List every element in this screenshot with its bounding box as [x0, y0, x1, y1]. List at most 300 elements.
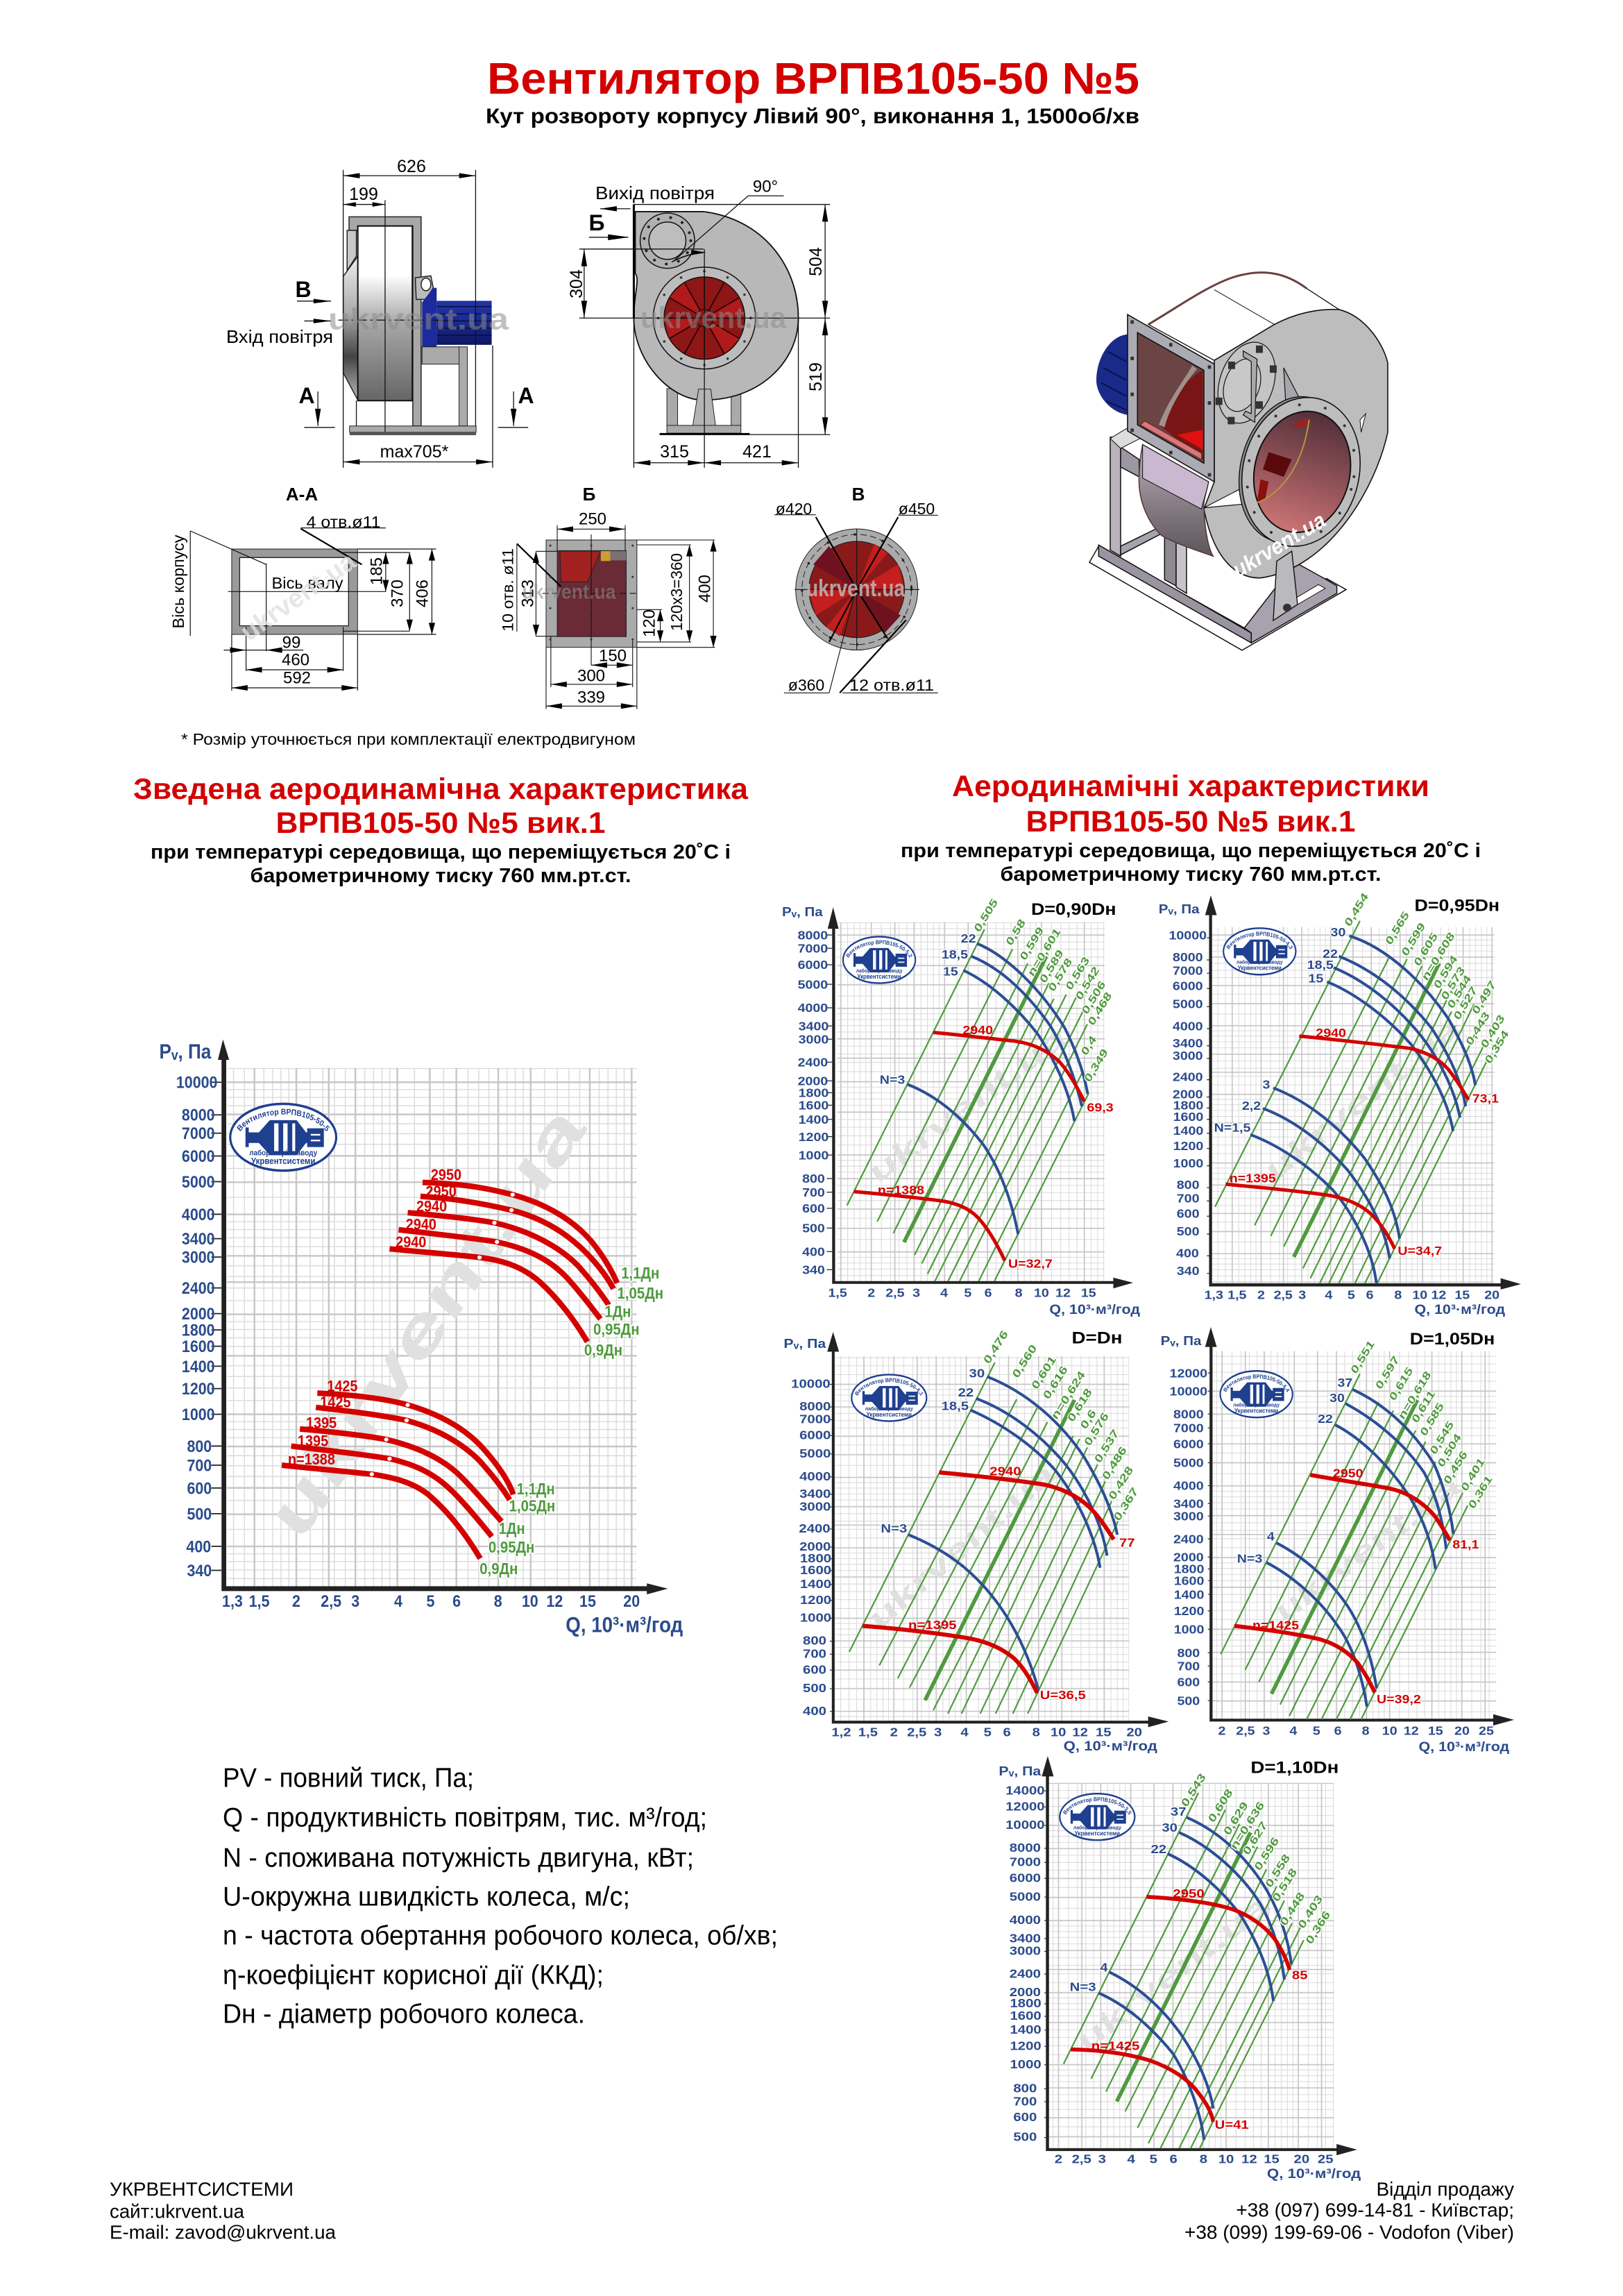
chart: D=1,10Dн: Pᵥ, Па	[999, 1764, 1042, 1779]
footer: company contacts: E-mail: zavod@ukrvent.ua	[110, 2221, 336, 2243]
chart: D=Dн: Pᵥ, Па	[783, 1337, 826, 1351]
chart: D=0,90Dн: U=32,7	[1008, 1256, 1053, 1270]
chart: D=1,10Dн: 14000	[1005, 1784, 1045, 1798]
chart: D=0,90Dн: 4	[940, 1285, 949, 1299]
chart: summary characteristic: 4000	[182, 1205, 215, 1224]
chart: D=Dн: 6000	[799, 1428, 831, 1442]
chart: D=1,10Dн: 600	[1013, 2111, 1037, 2125]
heading: aerodynamic characteristics	[901, 770, 1481, 886]
chart: D=0,95Dн: 6000	[1173, 979, 1203, 993]
chart: summary characteristic: 2950	[426, 1183, 457, 1200]
chart: D=Dн: 0,476	[981, 1328, 1010, 1366]
section Б outlet flange drawing: 339	[577, 689, 605, 707]
chart: D=1,05Dн: 2400	[1173, 1532, 1204, 1546]
chart: summary characteristic: 500	[187, 1504, 212, 1523]
logo stamp: Вентилятор ВРПВ105-50-5	[237, 1109, 330, 1131]
chart: D=0,90Dн: 500	[802, 1221, 825, 1235]
logo stamp: Вентилятор ВРПВ105-50-4,1	[855, 1378, 923, 1396]
chart: D=0,95Dн: 1,5	[1227, 1288, 1246, 1301]
chart: D=0,95Dн: Pᵥ, Па	[1159, 902, 1200, 917]
chart: D=0,90Dн: 0,468	[1085, 989, 1114, 1028]
chart: D=1,10Dн: 20	[1294, 2153, 1309, 2166]
chart: D=1,05Dн: 7000	[1173, 1421, 1204, 1435]
chart: D=1,10Dн	[999, 1756, 1361, 2181]
chart: D=1,05Dн: N=3	[1237, 1551, 1262, 1565]
heading: summary characteristic: ВРПВ105-50 №5 вик.1	[276, 807, 605, 840]
chart: D=1,05Dн: 1800	[1174, 1562, 1204, 1576]
chart: D=1,10Dн: 15	[1264, 2153, 1280, 2166]
legend text block: U-окружна швидкість колеса, м/с;	[223, 1882, 630, 1911]
chart: summary characteristic: 6	[452, 1592, 461, 1610]
chart: D=1,10Dн: 12000	[1005, 1800, 1045, 1814]
logo stamp: лабораторія заводу	[865, 1406, 914, 1412]
chart: D=Dн: 6	[1003, 1725, 1011, 1739]
chart: D=1,05Dн: 3400	[1173, 1496, 1204, 1510]
chart: D=0,90Dн: 5000	[798, 977, 828, 991]
chart: D=Dн: 18,5	[942, 1399, 969, 1413]
chart: D=0,95Dн: 0,527	[1451, 984, 1479, 1022]
chart: D=1,05Dн: 1200	[1174, 1604, 1204, 1618]
chart: D=0,90Dн: 0,349	[1082, 1046, 1110, 1085]
chart: D=0,90Dн: 700	[802, 1185, 825, 1199]
chart: D=1,05Dн: 0,361	[1466, 1473, 1495, 1511]
chart: D=Dн: 10000	[791, 1378, 831, 1391]
chart: D=Dн: 0,367	[1111, 1485, 1141, 1523]
chart: D=0,90Dн: 15	[943, 964, 958, 978]
chart: D=1,05Dн: 10	[1382, 1723, 1397, 1737]
chart: D=0,95Dн: 7000	[1173, 963, 1203, 977]
chart: D=0,90Dн: 2000	[798, 1074, 828, 1088]
chart: D=1,05Dн: 4	[1267, 1529, 1275, 1543]
footer: sales contacts	[1184, 2178, 1514, 2243]
chart: summary characteristic: 1,05Дн	[509, 1497, 555, 1515]
chart: D=1,10Dн: 3	[1098, 2153, 1106, 2166]
chart: D=1,10Dн: 0,558	[1263, 1852, 1292, 1890]
chart: D=0,95Dн: 700	[1177, 1191, 1199, 1205]
chart: D=0,95Dн: n=0,608	[1419, 929, 1456, 983]
isometric fan 3D view: ukrvent.ua	[1227, 507, 1330, 582]
chart: D=Dн: 0,537	[1092, 1427, 1121, 1465]
chart: D=Dн: 1600	[800, 1564, 831, 1578]
chart: D=0,90Dн: 600	[802, 1201, 825, 1215]
chart: D=1,10Dн: 2000	[1010, 1986, 1041, 2000]
chart: D=Dн: 5000	[799, 1447, 831, 1461]
chart: D=1,05Dн: n=0,618	[1395, 1369, 1433, 1421]
chart: D=Dн: D=Dн	[1071, 1328, 1123, 1347]
isometric fan 3D view	[1089, 273, 1388, 650]
legend text block	[223, 1763, 778, 2029]
chart: D=0,95Dн: 0,403	[1478, 1012, 1506, 1051]
chart: D=1,10Dн: 8	[1200, 2153, 1207, 2166]
chart: D=Dн: ukrvent.ua	[863, 1455, 1062, 1637]
chart: summary characteristic: 5	[427, 1592, 435, 1610]
chart: D=0,90Dн: 3000	[799, 1032, 829, 1046]
legend text block: N - споживана потужність двигуна, кВт;	[223, 1843, 694, 1873]
chart: D=1,10Dн: ukrvent.ua	[1071, 1887, 1275, 2059]
chart: D=0,95Dн: 3	[1262, 1078, 1270, 1092]
chart: D=0,90Dн: 2	[867, 1285, 875, 1299]
heading: aerodynamic characteristics: при температурі середовища, що переміщується 20˚С і	[901, 840, 1481, 862]
section Б outlet flange drawing: 150	[599, 647, 627, 665]
chart: D=1,05Dн: 37	[1338, 1376, 1352, 1390]
chart: D=Dн: 3	[934, 1725, 942, 1739]
chart: D=Dн: 0,576	[1082, 1410, 1111, 1449]
chart: D=1,10Dн: 37	[1171, 1805, 1187, 1819]
footnote: * Розмір уточнюється при комплектації електродвигуном	[181, 730, 636, 748]
chart: D=0,95Dн: 0,354	[1482, 1027, 1511, 1066]
chart: D=Dн: 8	[1033, 1725, 1040, 1739]
chart: summary characteristic: Pᵥ, Па	[160, 1040, 212, 1063]
chart: summary characteristic: 3	[351, 1592, 359, 1610]
view В inlet drawing: 12 отв.ø11	[849, 676, 934, 694]
chart: D=0,90Dн: 1400	[799, 1113, 829, 1126]
chart: D=Dн: 22	[958, 1386, 974, 1400]
logo stamp: лабораторія заводу	[1233, 1401, 1280, 1408]
chart: D=Dн: 1,5	[858, 1725, 878, 1739]
chart: D=1,05Dн: 800	[1177, 1646, 1200, 1660]
chart: D=0,90Dн: 1800	[799, 1086, 829, 1099]
chart: summary characteristic: ukrvent.ua	[254, 1089, 599, 1553]
chart: D=1,05Dн: 12000	[1170, 1366, 1207, 1380]
section A-A drawing: 4 отв.ø11	[307, 513, 380, 531]
chart: D=1,10Dн: U=41	[1215, 2118, 1249, 2132]
chart: summary characteristic: 5000	[182, 1172, 215, 1191]
chart: D=0,90Dн: 0,578	[1046, 955, 1074, 994]
chart: D=1,10Dн: 5000	[1010, 1890, 1041, 1904]
chart: D=1,05Dн: 0,401	[1459, 1455, 1487, 1494]
chart: D=1,05Dн: 1000	[1174, 1622, 1204, 1636]
chart: summary characteristic: 1,5	[249, 1592, 270, 1610]
chart: D=1,05Dн: 2950	[1333, 1466, 1363, 1480]
chart: D=0,95Dн: U=34,7	[1397, 1244, 1442, 1258]
chart: summary characteristic: 1800	[182, 1320, 215, 1340]
chart: D=0,95Dн: 18,5	[1307, 958, 1334, 972]
chart: summary characteristic: 2940	[416, 1199, 447, 1215]
chart: D=Dн: 1800	[800, 1552, 831, 1566]
chart: D=Dн: N=3	[881, 1522, 907, 1536]
chart: D=1,05Dн: 700	[1177, 1659, 1200, 1673]
chart: summary characteristic: 600	[187, 1478, 212, 1498]
chart: summary characteristic: 2	[292, 1592, 300, 1610]
section A-A drawing: 460	[282, 651, 309, 669]
chart: D=Dн: 77	[1119, 1537, 1135, 1550]
chart: summary characteristic: 6000	[182, 1147, 215, 1165]
chart: D=1,10Dн: 700	[1013, 2095, 1037, 2109]
chart: D=Dн: 1,2	[831, 1725, 851, 1739]
logo stamp: Укрвентсистеми	[1075, 1830, 1120, 1837]
heading: summary characteristic: при температурі середовища, що переміщується 20˚С і	[151, 841, 731, 863]
chart: summary characteristic: 1Дн	[499, 1519, 525, 1537]
chart: D=Dн: 4	[960, 1725, 969, 1739]
chart: D=0,90Dн: 6000	[798, 958, 828, 972]
chart: D=0,90Dн: 18,5	[942, 947, 968, 961]
logo stamp	[842, 936, 916, 984]
chart: D=1,10Dн: n=0,636	[1227, 1799, 1266, 1852]
chart: D=1,05Dн: ukrvent.ua	[1270, 1467, 1465, 1629]
section A-A drawing	[169, 484, 436, 691]
chart: D=1,05Dн: 0,585	[1418, 1400, 1446, 1438]
chart: D=1,10Dн: 0,403	[1295, 1893, 1325, 1931]
chart: D=0,90Dн: 4000	[798, 1001, 828, 1015]
chart: D=Dн: 3400	[799, 1487, 831, 1501]
chart: D=1,10Dн: Q, 10³·м³/год	[1267, 2166, 1361, 2181]
chart: summary characteristic: Q, 10³·м³/год	[566, 1613, 683, 1637]
side view drawing	[226, 157, 534, 468]
chart: D=0,95Dн: 5000	[1173, 997, 1203, 1011]
chart: D=1,10Dн: 8000	[1010, 1841, 1041, 1855]
chart: D=0,95Dн: 2000	[1173, 1087, 1203, 1101]
logo stamp: Вентилятор ВРПВ105-50-4,4	[1223, 1374, 1289, 1392]
chart: D=1,05Dн: 22	[1318, 1412, 1333, 1426]
logo stamp	[1059, 1793, 1135, 1841]
speed curves	[1071, 1897, 1289, 2122]
chart: D=Dн: 5	[984, 1725, 992, 1739]
logo stamp: Укрвентсистеми	[867, 1411, 912, 1418]
heading: summary characteristic: барометричному тиску 760 мм.рт.ст.	[250, 865, 631, 887]
title: Вентилятор ВРПВ105-50 №5	[487, 53, 1139, 103]
logo stamp	[1223, 927, 1296, 976]
section A-A drawing: 99	[282, 633, 300, 652]
chart: summary characteristic: 1425	[327, 1378, 358, 1395]
footer: company contacts	[110, 2178, 336, 2243]
chart: D=1,05Dн: 1400	[1174, 1587, 1204, 1601]
chart: D=0,90Dн: 3400	[799, 1019, 829, 1033]
chart: summary characteristic: 1,3	[222, 1592, 243, 1610]
section Б outlet flange drawing: 250	[579, 509, 606, 529]
front view drawing: 504	[806, 247, 826, 276]
efficiency lines	[1215, 921, 1488, 1283]
chart: D=1,10Dн: 2	[1055, 2153, 1062, 2166]
chart: D=Dн	[783, 1328, 1169, 1754]
footer: company contacts: сайт:ukrvent.ua	[110, 2200, 244, 2222]
chart: D=0,95Dн: Q, 10³·м³/год	[1414, 1302, 1505, 1317]
chart: D=Dн: 0,6	[1078, 1407, 1098, 1431]
chart: D=0,95Dн: 340	[1177, 1264, 1199, 1278]
chart: summary characteristic: 700	[187, 1455, 212, 1475]
chart: D=1,05Dн: 30	[1329, 1391, 1345, 1405]
chart: D=1,05Dн: 10000	[1170, 1384, 1207, 1398]
side view drawing: В	[295, 277, 312, 302]
chart: D=1,05Dн: 2	[1218, 1723, 1225, 1737]
chart: D=0,95Dн: 10	[1412, 1288, 1427, 1301]
chart: D=Dн: 700	[803, 1647, 826, 1661]
legend text block: η-коефіцієнт корисної дії (ККД);	[223, 1960, 604, 1991]
chart: D=1,10Dн: 85	[1292, 1968, 1308, 1982]
chart: D=0,95Dн: 0,594	[1431, 952, 1460, 991]
chart: D=0,95Dн: 8000	[1173, 950, 1203, 964]
chart: D=0,95Dн: 2	[1257, 1288, 1265, 1301]
chart: D=0,90Dн: 2400	[798, 1055, 828, 1069]
chart: D=1,10Dн: 2,5	[1072, 2153, 1091, 2166]
logo stamp: Укрвентсистеми	[858, 972, 901, 980]
chart: D=Dн: 2940	[989, 1464, 1021, 1478]
footer: sales contacts: Відділ продажу	[1376, 2178, 1514, 2200]
chart: D=Dн: 2	[890, 1725, 898, 1739]
logo stamp: Укрвентсистеми	[1234, 1407, 1278, 1415]
chart: D=0,95Dн: 12	[1431, 1288, 1446, 1301]
chart: D=0,90Dн: 0,589	[1037, 947, 1066, 986]
chart: D=1,05Dн: 15	[1428, 1723, 1443, 1737]
logo stamp: Вентилятор ВРПВ105-50-5,2	[846, 940, 912, 958]
chart: D=Dн: 0,486	[1100, 1444, 1129, 1483]
logo stamp: Укрвентсистеми	[1238, 964, 1282, 972]
chart: D=0,95Dн: D=0,95Dн	[1415, 897, 1499, 915]
front view drawing: 421	[742, 442, 772, 462]
chart: D=Dн: 0,428	[1106, 1464, 1135, 1502]
chart: D=1,10Dн: 0,366	[1303, 1908, 1332, 1947]
chart: D=0,95Dн: 15	[1308, 972, 1323, 986]
chart: D=0,95Dн: 2940	[1316, 1026, 1346, 1040]
legend text block: Dн - діаметр робочого колеса.	[223, 1999, 585, 2029]
side view drawing: ukrvent.ua	[328, 303, 509, 336]
chart: summary characteristic: 15	[579, 1592, 596, 1610]
section A-A drawing: 592	[283, 669, 311, 687]
chart: summary characteristic: 1000	[182, 1405, 215, 1424]
side view drawing: А	[298, 383, 315, 408]
chart: D=0,90Dн: 15	[1081, 1285, 1096, 1299]
chart: D=1,05Dн: 0,615	[1386, 1365, 1415, 1403]
footer: sales contacts: +38 (097) 699-14-81 - Київстар;	[1236, 2199, 1514, 2221]
chart: D=1,05Dн	[1161, 1327, 1514, 1755]
chart: D=1,10Dн: N=3	[1070, 1981, 1096, 1994]
logo stamp	[851, 1374, 927, 1422]
heading: summary characteristic: Зведена аеродинамічна характеристика	[133, 773, 749, 806]
chart: summary characteristic: 10	[522, 1592, 538, 1610]
logo stamp: лабораторія заводу	[249, 1149, 317, 1157]
chart: summary characteristic: 0,9Дн	[584, 1341, 622, 1359]
chart: D=1,05Dн: 8000	[1173, 1407, 1204, 1421]
chart: D=0,90Dн: 0,58	[1003, 916, 1028, 948]
section A-A drawing: А-А	[286, 484, 318, 505]
side view drawing: А	[518, 383, 534, 408]
chart: D=0,95Dн: 0,605	[1411, 930, 1440, 968]
chart: D=1,10Dн: 3000	[1010, 1945, 1041, 1958]
chart: summary characteristic: 2940	[406, 1217, 436, 1233]
chart: D=1,10Dн: 0,543	[1179, 1771, 1208, 1809]
section A-A drawing: 370	[389, 580, 407, 607]
chart: D=1,05Dн: 0,597	[1373, 1353, 1402, 1392]
legend text block: Q - продуктивність повітрям, тис. м³/год;	[223, 1803, 707, 1832]
side view drawing: Вхід повітря	[226, 326, 333, 347]
chart: D=Dн: 3000	[799, 1500, 831, 1514]
chart: D=0,95Dн: 0,454	[1342, 890, 1371, 929]
chart: D=1,05Dн: 5	[1313, 1723, 1320, 1737]
chart: D=0,90Dн: 340	[802, 1263, 825, 1276]
chart: D=Dн: 7000	[799, 1413, 831, 1426]
chart: D=1,10Dн: 4	[1100, 1961, 1108, 1975]
chart: D=Dн: 1400	[800, 1578, 831, 1592]
chart: D=0,95Dн: 0,565	[1383, 909, 1411, 947]
logo stamp: Вентилятор ВРПВ105-50-4,3	[1227, 931, 1293, 949]
chart: D=0,95Dн: 73,1	[1472, 1092, 1499, 1106]
chart: D=Dн: 4000	[799, 1470, 831, 1484]
chart: summary characteristic: 0,95Дн	[488, 1538, 534, 1556]
legend text block: n - частота обертання робочого колеса, об/хв;	[223, 1921, 778, 1950]
chart: D=0,95Dн: 800	[1177, 1178, 1199, 1192]
chart: D=1,10Dн: 10000	[1005, 1818, 1045, 1832]
chart: D=1,10Dн: 7000	[1010, 1856, 1041, 1869]
chart: summary characteristic: 1,05Дн	[618, 1284, 663, 1303]
chart: D=1,10Dн: 1600	[1010, 2009, 1042, 2023]
chart: D=Dн: Q, 10³·м³/год	[1064, 1739, 1157, 1754]
power curves	[1266, 1390, 1453, 1707]
power curves	[907, 943, 1088, 1234]
front view drawing: 90°	[753, 178, 778, 196]
front view drawing: 519	[806, 362, 826, 391]
front view drawing: ukrvent.ua	[640, 301, 786, 335]
front view drawing: Вихід повітря	[595, 183, 715, 203]
chart: D=1,05Dн: 0,545	[1427, 1418, 1456, 1457]
chart: D=1,05Dн: 0,611	[1409, 1387, 1437, 1426]
logo stamp: лабораторія заводу	[856, 968, 902, 974]
chart: D=0,90Dн: 8000	[798, 928, 828, 942]
footer: sales contacts: +38 (099) 199-69-06 - Vodofon (Viber)	[1184, 2221, 1514, 2243]
chart: D=0,95Dн: 15	[1454, 1288, 1470, 1301]
logo stamp	[1219, 1370, 1293, 1419]
chart: D=1,10Dн: 22	[1150, 1843, 1166, 1856]
section Б outlet flange drawing: 120	[640, 609, 659, 637]
chart: D=0,95Dн: 0,599	[1399, 920, 1427, 959]
efficiency lines	[1064, 1793, 1304, 2148]
chart: D=1,05Dн: 4	[1289, 1723, 1298, 1737]
chart: D=1,10Dн: 25	[1318, 2153, 1334, 2166]
chart: D=0,90Dн	[782, 896, 1140, 1317]
side view drawing: max705*	[380, 442, 449, 462]
section A-A drawing: 406	[414, 580, 432, 607]
chart: D=0,95Dн: 600	[1177, 1206, 1199, 1220]
chart: D=Dн: 10	[1051, 1725, 1066, 1739]
chart: D=1,10Dн: 6	[1170, 2153, 1178, 2166]
chart: D=0,95Dн: 400	[1176, 1246, 1199, 1260]
section Б outlet flange drawing: Б	[583, 484, 595, 505]
chart: summary characteristic: 2950	[431, 1167, 461, 1183]
chart: D=1,10Dн: 2950	[1173, 1887, 1205, 1901]
chart: D=0,90Dн: N=3	[880, 1072, 905, 1086]
chart: D=0,95Dн: 22	[1323, 947, 1338, 961]
chart: D=1,05Dн: 5000	[1173, 1455, 1204, 1469]
chart: D=1,05Dн: 0,456	[1441, 1448, 1470, 1487]
chart: summary characteristic: 7000	[182, 1124, 215, 1142]
speed curves	[863, 1472, 1114, 1693]
side view drawing: 199	[349, 185, 378, 204]
chart: D=0,90Dн: 1000	[799, 1148, 829, 1162]
chart: D=0,90Dн: Pᵥ, Па	[782, 905, 824, 920]
chart: D=1,05Dн: 1600	[1174, 1573, 1204, 1587]
chart: D=0,95Dн: 4000	[1173, 1019, 1203, 1033]
chart: D=1,10Dн: 3400	[1010, 1932, 1041, 1945]
chart: D=0,95Dн: 30	[1331, 925, 1345, 939]
heading: aerodynamic characteristics: Аеродинамічні характеристики	[952, 770, 1429, 803]
chart: D=1,05Dн: Q, 10³·м³/год	[1419, 1739, 1509, 1755]
chart: summary characteristic: 2000	[182, 1304, 215, 1323]
chart: D=0,95Dн: 20	[1484, 1288, 1499, 1301]
chart: D=0,95Dн: 1200	[1173, 1139, 1203, 1153]
chart: D=Dн: 0,560	[1010, 1342, 1039, 1381]
chart: summary characteristic: 2400	[182, 1278, 215, 1297]
chart: D=0,95Dн: 0,443	[1463, 1009, 1492, 1048]
chart: summary characteristic: 1425	[320, 1394, 351, 1411]
chart: D=Dн: 30	[969, 1367, 985, 1381]
chart: D=1,05Dн: U=39,2	[1377, 1692, 1421, 1706]
chart: D=1,05Dн: 4000	[1173, 1479, 1204, 1493]
chart: D=0,95Dн: ukrvent.ua	[1259, 1008, 1466, 1188]
heading: summary characteristic	[133, 773, 749, 887]
chart: D=Dн: 20	[1126, 1725, 1142, 1739]
chart: D=1,05Dн: 2000	[1173, 1550, 1204, 1564]
chart: summary characteristic: 2940	[396, 1234, 426, 1251]
chart: D=Dн: n=0,624	[1048, 1368, 1088, 1421]
chart: D=1,10Dн: 1400	[1010, 2023, 1042, 2037]
